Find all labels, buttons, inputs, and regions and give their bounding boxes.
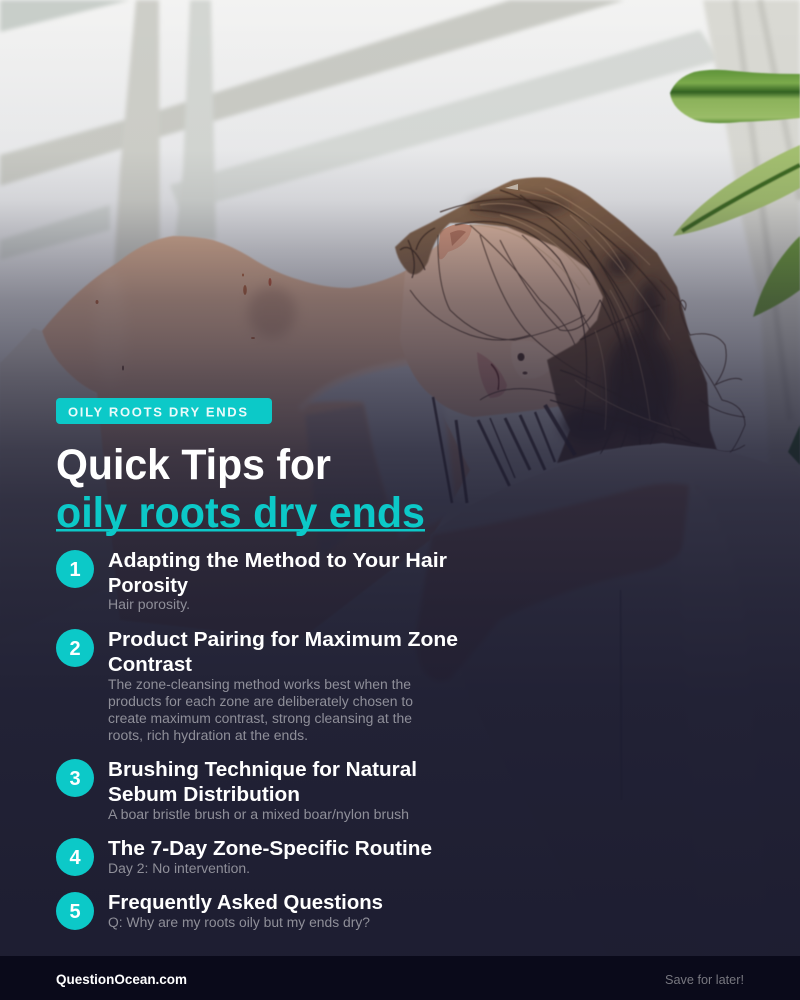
tip 2 <box>56 628 458 743</box>
footer bar: Save for later! <box>665 973 744 987</box>
woman: face <box>400 225 606 417</box>
tip 3 <box>56 758 417 822</box>
dark shadows in hair <box>470 199 674 443</box>
badge: topic label: OILY ROOTS DRY ENDS <box>68 404 247 420</box>
tip 2: Contrast <box>108 653 192 676</box>
tip 1: Hair porosity. <box>108 597 190 612</box>
tip 2: create maximum contrast, strong cleansing at the <box>108 711 412 726</box>
towel around body <box>430 444 800 960</box>
tip 4: 4 <box>69 847 81 869</box>
tip 2: roots, rich hydration at the ends. <box>108 728 308 743</box>
tip 4: The 7-Day Zone-Specific Routine <box>108 837 432 860</box>
skin marks <box>96 274 272 370</box>
tip 2: The zone-cleansing method works best when the <box>108 677 411 692</box>
tip 5 <box>56 891 383 930</box>
ear <box>438 224 472 259</box>
gap under neck and chest rim <box>307 362 470 540</box>
tip 3: Brushing Technique for Natural <box>108 758 417 781</box>
tip 3: A boar bristle brush or a mixed boar/nylon brush <box>108 807 409 822</box>
tip 1 <box>56 549 447 612</box>
nose <box>511 341 555 379</box>
tip 4: Day 2: No intervention. <box>108 861 250 876</box>
curtain <box>703 0 800 520</box>
woman: back, shoulder and neck <box>42 236 470 640</box>
tip 5: Frequently Asked Questions <box>108 891 383 914</box>
tip 1: Adapting the Method to Your Hair <box>108 549 447 572</box>
footer bar: QuestionOcean.com <box>56 971 187 987</box>
tip 2: Product Pairing for Maximum Zone <box>108 628 458 651</box>
badge: topic label <box>56 398 272 424</box>
tip 5: Q: Why are my roots oily but my ends dry? <box>108 915 370 930</box>
tip 3: Sebum Distribution <box>108 783 300 806</box>
woman: wet hair <box>395 177 745 463</box>
tip 5: 5 <box>69 901 81 923</box>
towel at left <box>0 328 125 640</box>
title: oily roots dry ends <box>56 489 425 537</box>
plant leaves <box>670 70 800 465</box>
title: Quick Tips for <box>56 441 331 489</box>
tip 2: 2 <box>69 638 81 660</box>
hair strands hanging <box>433 397 575 503</box>
tip 2: products for each zone are deliberately chosen to <box>108 694 413 709</box>
footer bar <box>0 956 800 1000</box>
tip 1: 1 <box>69 559 81 581</box>
tip 4 <box>56 837 432 876</box>
title <box>56 441 425 537</box>
arm and hand <box>415 483 698 682</box>
lips <box>477 352 507 398</box>
window frame bars <box>0 0 720 300</box>
tip 1: Porosity <box>108 574 189 597</box>
tip 3: 3 <box>69 768 81 790</box>
